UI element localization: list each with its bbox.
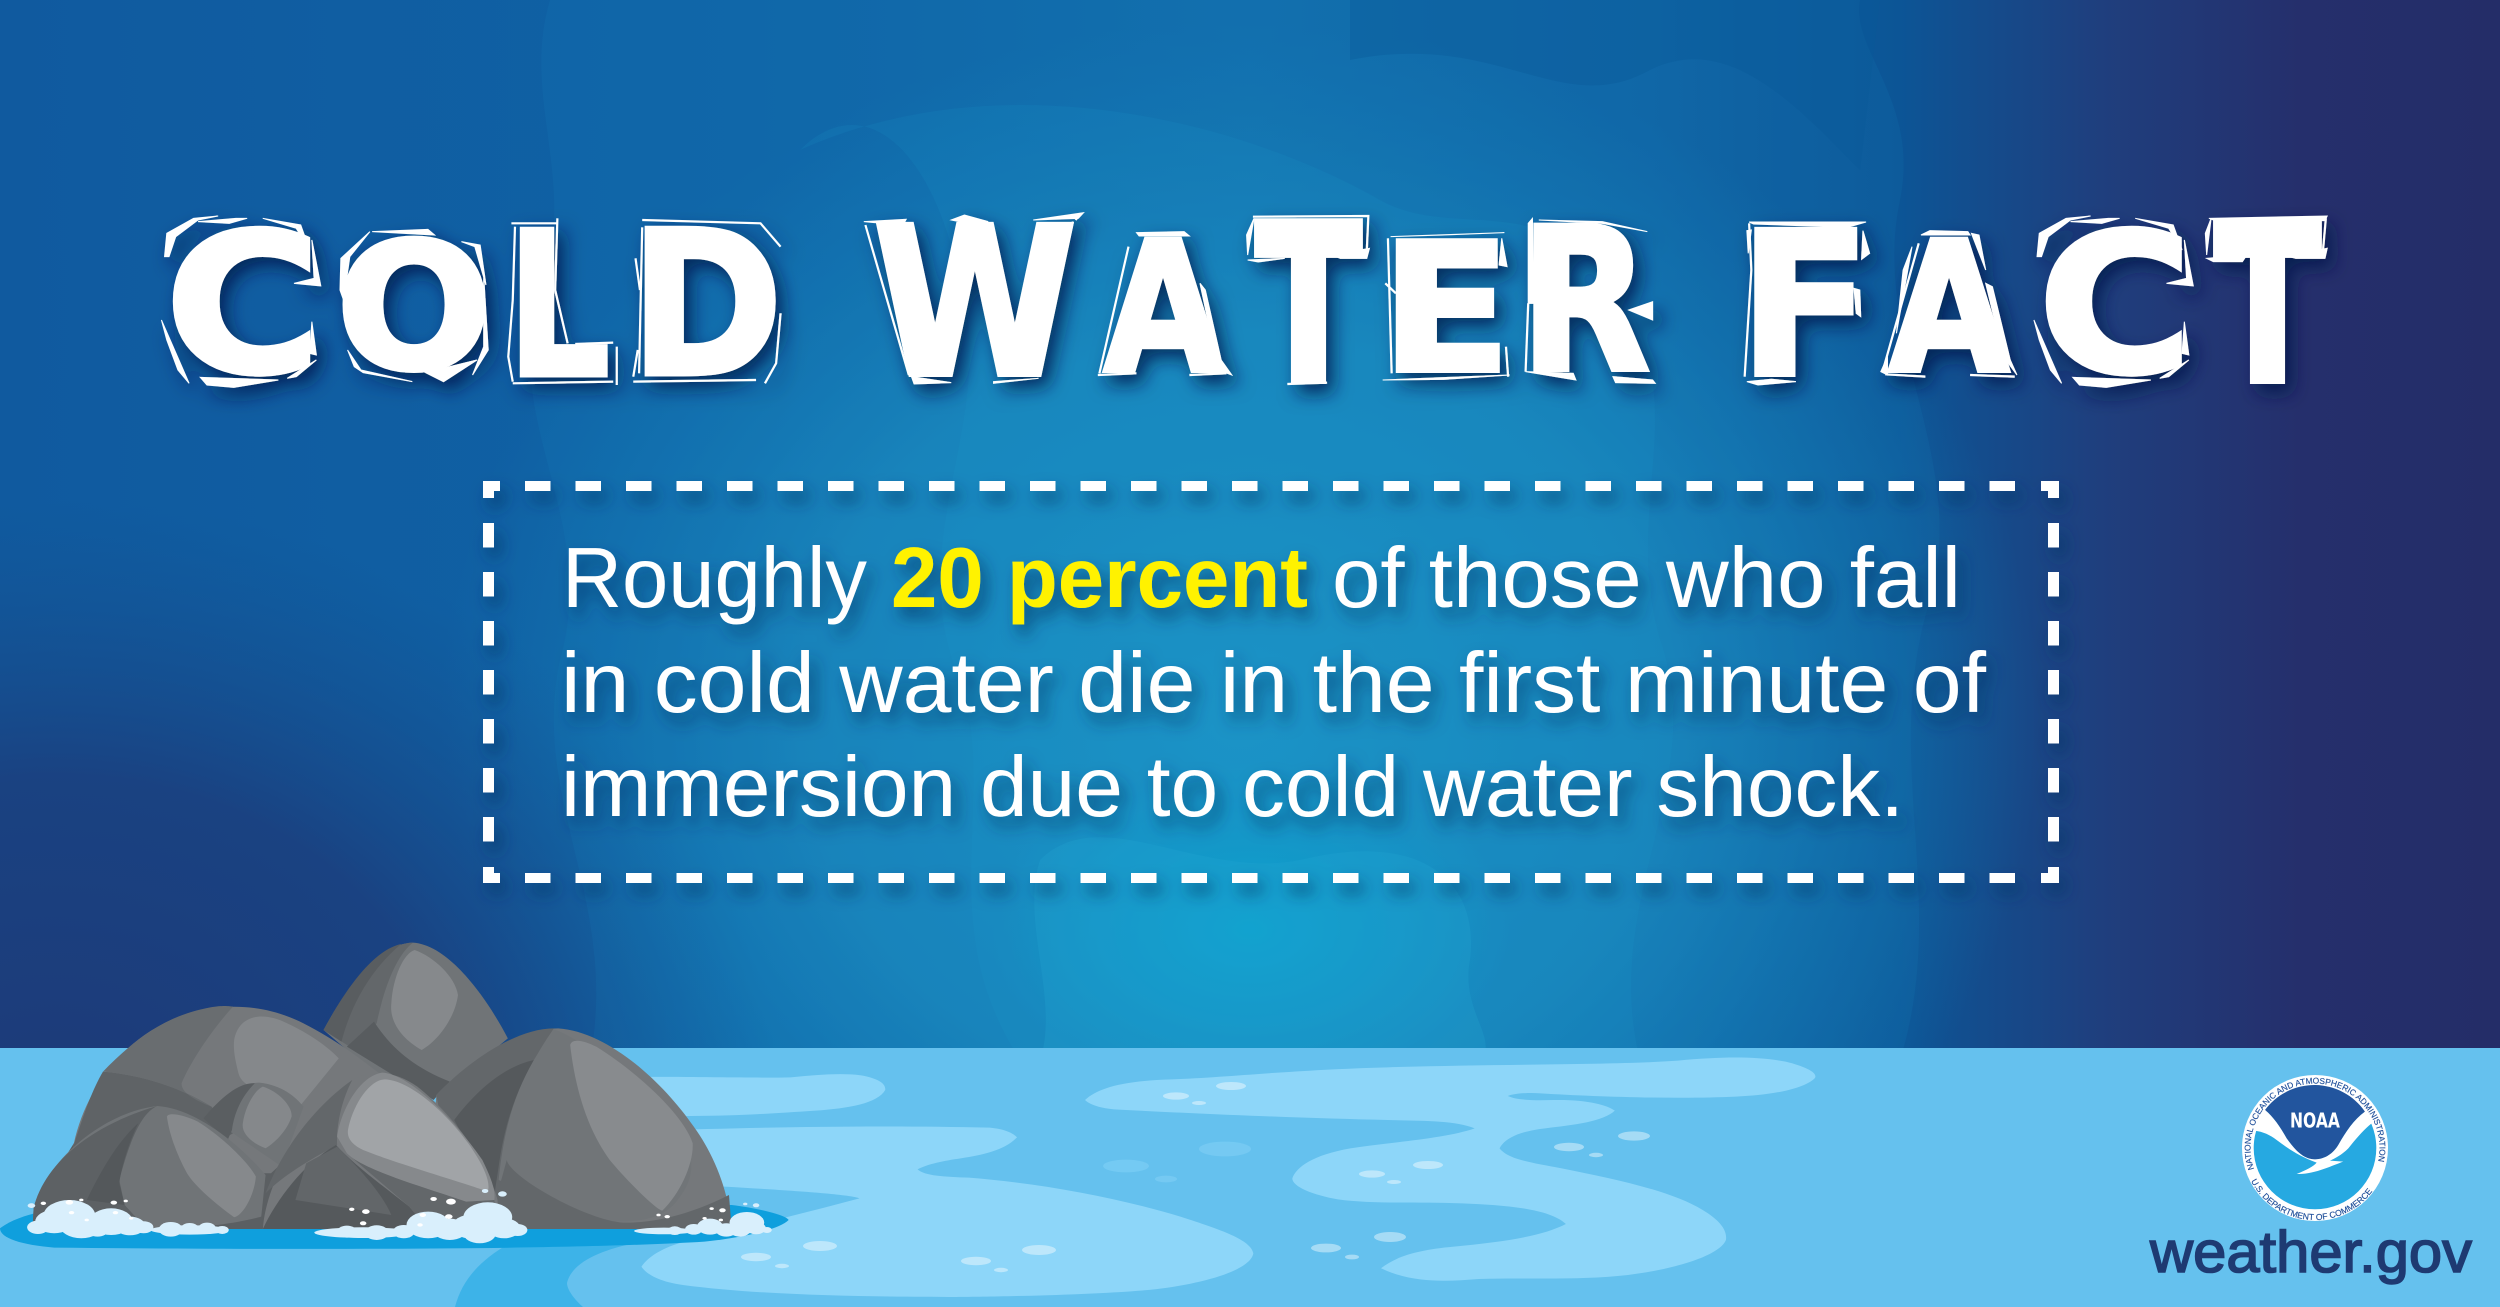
- water: bubbles: [741, 1082, 1650, 1272]
- title word: COLD WATER FACT letters: F: [1739, 190, 1871, 422]
- title word: COLD WATER FACT letters: C: [2038, 192, 2192, 418]
- water: pale ripple right: [1085, 1058, 1815, 1281]
- title: Cold Water Fact: [161, 180, 2327, 430]
- title word: COLD WATER FACT letters: T: [1256, 180, 1360, 430]
- fact text line 1: Roughly: [562, 531, 867, 626]
- title word: COLD WATER FACT letters: A: [1104, 204, 1222, 414]
- fact text line 1: of those who fall: [1332, 531, 1961, 626]
- rock: right: [434, 1028, 732, 1229]
- title word: COLD WATER FACT letters: L: [507, 190, 610, 423]
- title word: COLD WATER FACT letters: O: [336, 207, 492, 410]
- title word: COLD WATER FACT letters: C: [165, 192, 321, 418]
- logo: ring text: U.S. DEPARTMENT OF COMMERCE: [2252, 1178, 2372, 1220]
- foam droplets: [41, 1197, 726, 1227]
- foam splashes left: [27, 1200, 229, 1238]
- website: weather.gov: weather.gov: [2149, 1220, 2472, 1285]
- ice shards: COLD: [161, 216, 781, 387]
- fact text line 3: immersion due to cold water shock.: [561, 740, 1904, 835]
- ice shards: WATER: [864, 213, 1655, 384]
- rocks: dark base behind: [34, 1133, 732, 1229]
- foam splashes centre: [314, 1189, 527, 1243]
- water: darker ripple near rocks: [455, 1245, 626, 1307]
- rocks: pool of water: [0, 1205, 789, 1249]
- logo: ring text: NATIONAL OCEANIC AND ATMOSPHERIC ADMINISTRATION: [2244, 1078, 2386, 1170]
- fact text line 2: in cold water die in the first minute of: [561, 636, 1986, 731]
- rock: back left: [73, 1006, 379, 1173]
- logo: NOAA seal: [2242, 1075, 2388, 1221]
- ice shards: FACT: [1745, 216, 2327, 387]
- water surface: [0, 1048, 2500, 1307]
- fact text: [561, 531, 1986, 835]
- title word: COLD WATER FACT letters: T: [2216, 180, 2320, 430]
- rock: front centre: [263, 1073, 499, 1229]
- foam splashes right: [634, 1203, 772, 1237]
- fact box: dashed border: [483, 481, 2059, 883]
- logo: NOAA wordmark: NOAA: [2290, 1108, 2340, 1132]
- title word: COLD WATER FACT letters: D: [630, 189, 783, 422]
- water: faint bubbles: [1103, 1142, 1251, 1182]
- rock: small middle: [203, 1083, 304, 1167]
- rocks with foam: [0, 943, 789, 1249]
- title word: COLD WATER FACT letters: W: [873, 184, 1077, 424]
- title word: COLD WATER FACT letters: R: [1520, 186, 1650, 416]
- water: pale ripples left: [600, 1058, 1815, 1297]
- logo: ring text: [2244, 1078, 2386, 1220]
- fact text line 1: 20 percent: [891, 531, 1308, 626]
- title word: COLD WATER FACT letters: E: [1381, 206, 1511, 412]
- rock: front left: [33, 1106, 266, 1229]
- rock: tall back: [324, 943, 508, 1103]
- title word: COLD WATER FACT letters: A: [1889, 204, 2009, 414]
